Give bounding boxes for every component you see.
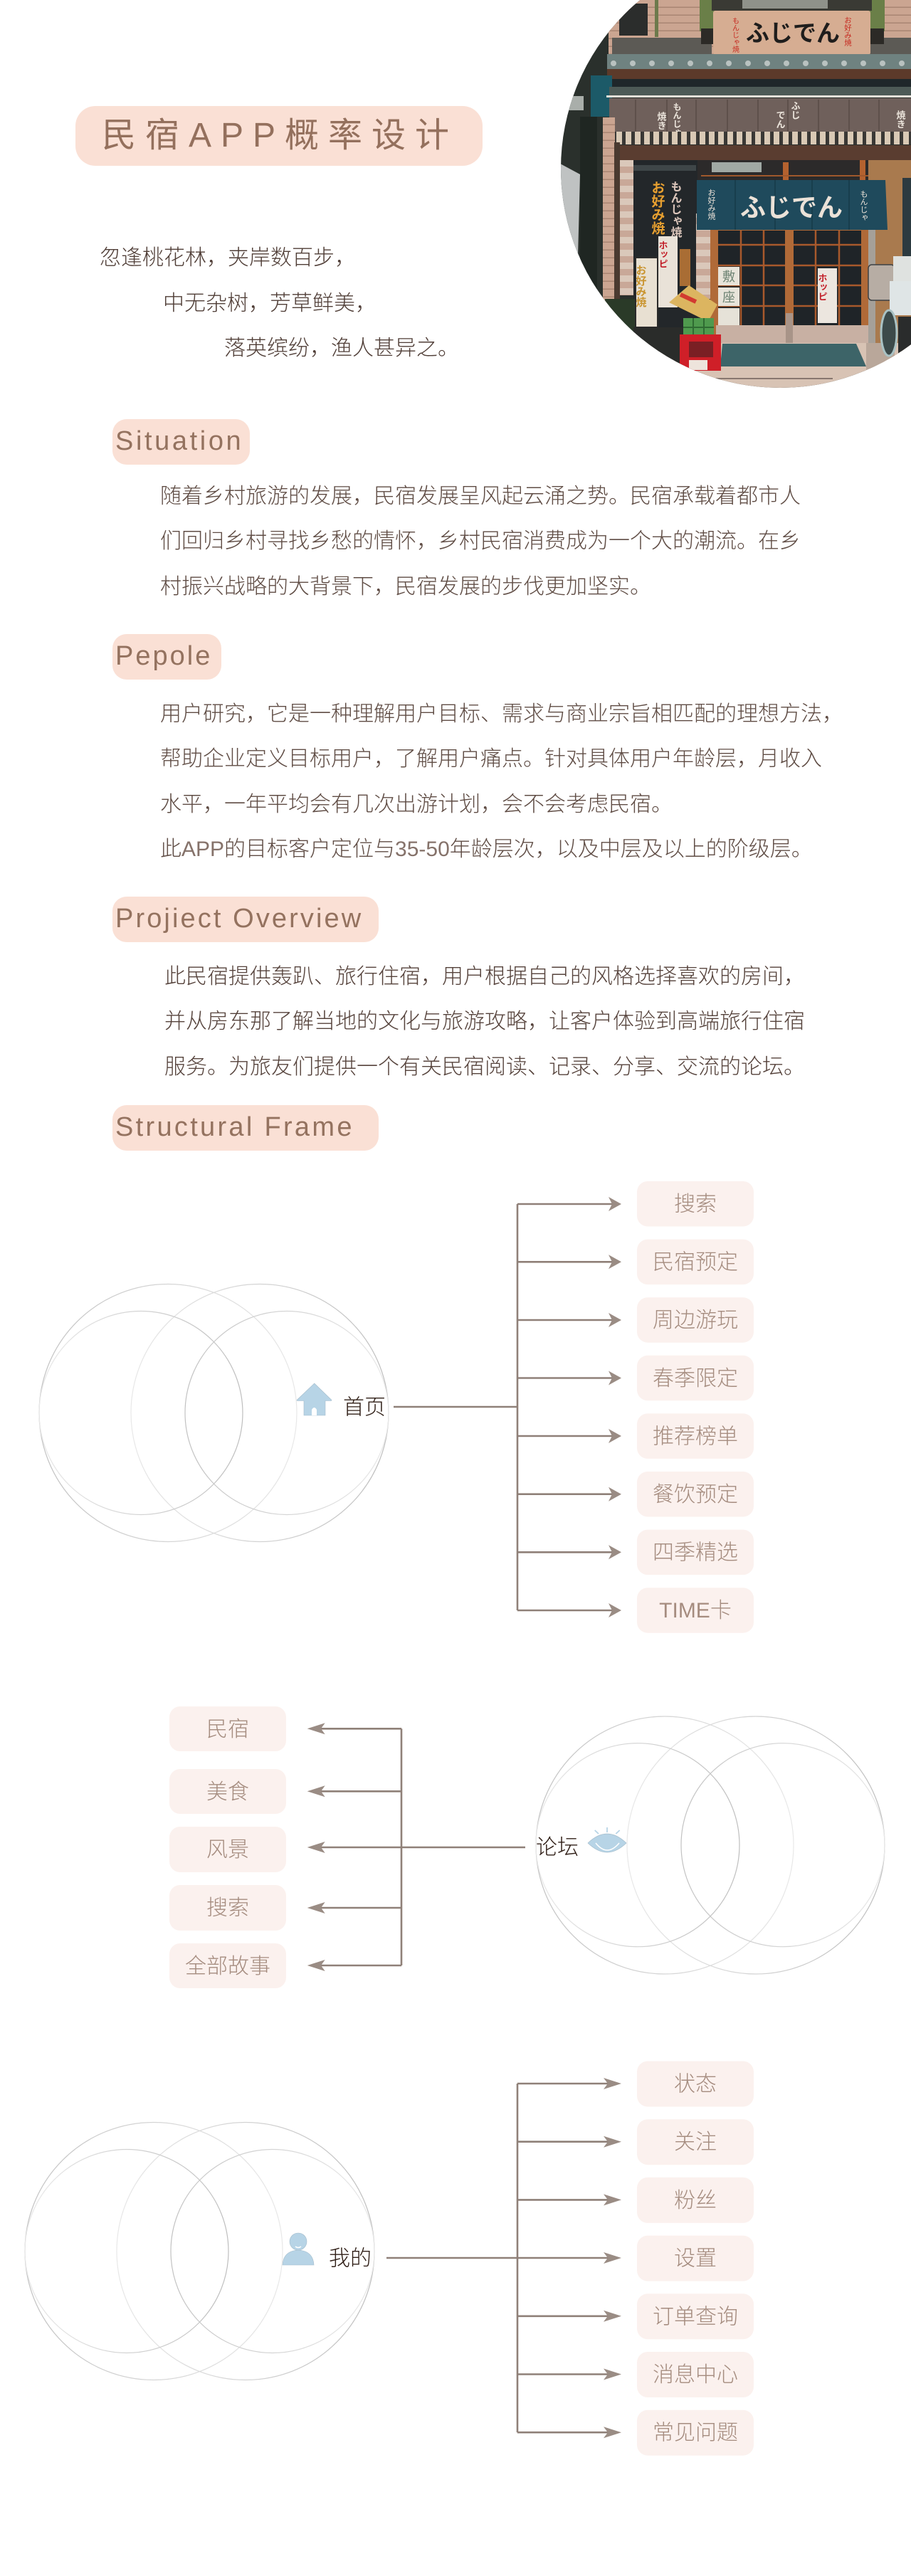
heading: Structural Frame (112, 1105, 379, 1151)
card: 设置 (637, 2236, 754, 2281)
card: 春季限定: 春季限定 (653, 1367, 738, 1390)
photo: Japanese storefront in circular crop: ふじでん (746, 20, 840, 46)
teal box (591, 75, 612, 117)
photo: Japanese storefront in circular crop: もんじゃ (859, 190, 868, 221)
photo: Japanese storefront in circular crop: ホッピ (658, 241, 668, 268)
photo: Japanese storefront in circular crop: でん (774, 110, 786, 129)
text block: situation: 随着乡村旅游的发展，民宿发展呈风起云涌之势。民宿承载着都市人 (160, 485, 801, 508)
card: TIME卡 (637, 1588, 754, 1633)
window above noren (697, 160, 885, 181)
text block: project overview: 服务。为旅友们提供一个有关民宿阅读、记录、分享、交流的论坛。 (164, 1055, 805, 1079)
walls (603, 117, 615, 302)
card: 状态 (637, 2061, 754, 2106)
card: 全部故事 (169, 1943, 286, 1988)
door notices (718, 267, 739, 285)
text block: situation: 村振兴战略的大背景下，民宿发展的步伐更加坚实。 (160, 575, 651, 598)
text block: situation (160, 485, 801, 598)
heading: Projiect Overview: Projiect Overview (115, 904, 363, 934)
label: 我的: 我的 (329, 2247, 372, 2270)
photo: Japanese storefront in circular crop: お好み焼 (635, 265, 646, 308)
ground and mat (648, 343, 911, 388)
label: 论坛: 论坛 (536, 1836, 579, 1859)
card: 状态: 状态 (674, 2072, 717, 2096)
connector lines (386, 2084, 612, 2432)
card: 风景 (169, 1827, 286, 1872)
poem intro text (100, 246, 459, 360)
icon: eye (588, 1827, 626, 1852)
overlapping circles (536, 1716, 885, 1974)
connector lines (317, 1728, 525, 1965)
card: 美食: 美食 (206, 1780, 249, 1804)
arrowheads (604, 2078, 621, 2438)
awning (609, 87, 911, 96)
card: 推荐榜单: 推荐榜单 (653, 1425, 738, 1448)
card: TIME卡: TIME卡 (659, 1599, 732, 1622)
card: 搜索: 搜索 (206, 1896, 249, 1920)
card: 粉丝 (637, 2178, 754, 2223)
card: 消息中心: 消息中心 (653, 2363, 738, 2387)
heading: Situation: Situation (115, 426, 243, 456)
photo: Japanese storefront in circular crop: 焼き (895, 110, 905, 129)
photo: Japanese storefront in circular crop: 敷 (722, 270, 735, 284)
card: 全部故事: 全部故事 (185, 1955, 270, 1978)
card: 四季精选: 四季精选 (653, 1541, 738, 1565)
title (75, 106, 483, 166)
photo: Japanese storefront in circular crop: お好み焼 (649, 181, 665, 236)
text block: people: 水平，一年平均会有几次出游计划，会不会考虑民宿。 (160, 793, 673, 816)
photo: Japanese storefront in circular crop: お好み焼 (707, 189, 716, 221)
heading: Pepole (112, 634, 221, 680)
card: 民宿: 民宿 (206, 1718, 249, 1741)
photo: Japanese storefront in circular crop: ふじ (790, 101, 800, 120)
card: 常见问题 (637, 2410, 754, 2456)
icon: person (283, 2233, 314, 2265)
text block: people: 帮助企业定义目标用户，了解用户痛点。针对具体用户年龄层，月收入 (160, 747, 822, 771)
card: 关注: 关注 (674, 2131, 717, 2154)
bicycle (868, 265, 895, 300)
card: 消息中心 (637, 2352, 754, 2397)
diagram: 论坛 structure (169, 1706, 885, 1988)
photo: Japanese storefront in circular crop: 焼き (656, 111, 666, 130)
dark window (633, 160, 697, 331)
diagram: 我的 structure (24, 2061, 754, 2456)
photo: Japanese storefront in circular crop: ふじでん (740, 193, 843, 222)
card: 四季精选 (637, 1530, 754, 1575)
roof tiles (607, 54, 911, 70)
door (710, 229, 868, 343)
photo: Japanese storefront in circular crop: ホッピ (817, 273, 827, 301)
stripes and beam (614, 132, 911, 144)
poem intro text: 忽逢桃花林，夹岸数百步， (100, 246, 356, 270)
label: 首页: 首页 (343, 1396, 386, 1419)
icon: house (297, 1383, 332, 1415)
card: 春季限定 (637, 1356, 754, 1400)
photo: Japanese storefront in circular crop: 座 (722, 290, 735, 305)
card: 风景: 风景 (206, 1838, 249, 1862)
card: 订单查询 (637, 2293, 754, 2339)
photo: Japanese storefront in circular crop: もんじゃ (672, 102, 682, 137)
card: 美食 (169, 1769, 286, 1814)
card: 推荐榜单 (637, 1413, 754, 1459)
card: 搜索: 搜索 (674, 1193, 717, 1216)
lower left (605, 299, 635, 334)
poem intro text: 中无杂树，芳草鲜美， (163, 292, 376, 315)
poem intro text: 落英缤纷，渔人甚异之。 (224, 337, 459, 360)
arrowheads (307, 1723, 325, 1971)
card: 粉丝: 粉丝 (674, 2189, 717, 2212)
card: 订单查询: 订单查询 (653, 2305, 738, 2328)
text block: project overview: 此民宿提供轰趴、旅行住宿，用户根据自己的风格选择喜欢的房间， (164, 965, 805, 988)
upper wall (609, 0, 911, 57)
card: 关注 (637, 2119, 754, 2165)
card: 民宿预定: 民宿预定 (653, 1251, 738, 1274)
connector lines (394, 1204, 612, 1610)
balcony (700, 0, 885, 31)
signs and crates (658, 236, 678, 307)
text block: project overview: 并从房东那了解当地的文化与旅游攻略，让客户体验到高端旅行住宿 (164, 1010, 805, 1033)
title: 民宿APP概率设计 (102, 117, 458, 154)
arrowheads (609, 1197, 621, 1617)
card: 周边游玩: 周边游玩 (653, 1309, 738, 1332)
photo: Japanese storefront in circular crop (561, 0, 911, 388)
photo: Japanese storefront in circular crop: もんじゃ焼 (669, 181, 682, 238)
card: 设置: 设置 (674, 2247, 717, 2271)
text block: people: 用户研究，它是一种理解用户目标、需求与商业宗旨相匹配的理想方法， (160, 702, 843, 726)
heading: Pepole: Pepole (115, 641, 212, 671)
heading: Structural Frame: Structural Frame (115, 1112, 354, 1142)
overlapping circles (39, 1284, 389, 1541)
shop sign (713, 11, 870, 55)
card: 常见问题: 常见问题 (653, 2422, 738, 2445)
card: 民宿预定 (637, 1240, 754, 1284)
text block: people (160, 702, 843, 861)
blue noren (697, 180, 888, 230)
card: 搜索 (637, 1181, 754, 1227)
card: 搜索 (169, 1885, 286, 1931)
overlapping circles (25, 2122, 374, 2380)
text block: situation: 们回归乡村寻找乡愁的情怀，乡村民宿消费成为一个大的潮流。在乡 (160, 529, 801, 553)
card: 餐饮预定: 餐饮预定 (653, 1483, 738, 1506)
text block: people: 此APP的目标客户定位与35-50年龄层次，以及中层及以上的阶级层。 (160, 838, 813, 861)
diagram: 首页 structure (38, 1181, 754, 1633)
heading: Situation (112, 419, 250, 465)
photo: Japanese storefront in circular crop: お好み焼 (843, 16, 852, 47)
card: 餐饮预定 (637, 1472, 754, 1517)
photo: Japanese storefront in circular crop: もんじゃ焼 (730, 17, 739, 53)
heading: Projiect Overview (112, 897, 379, 942)
right door wall (868, 160, 911, 366)
card: 民宿 (169, 1706, 286, 1751)
card: 周边游玩 (637, 1297, 754, 1343)
text block: project overview (164, 965, 805, 1079)
